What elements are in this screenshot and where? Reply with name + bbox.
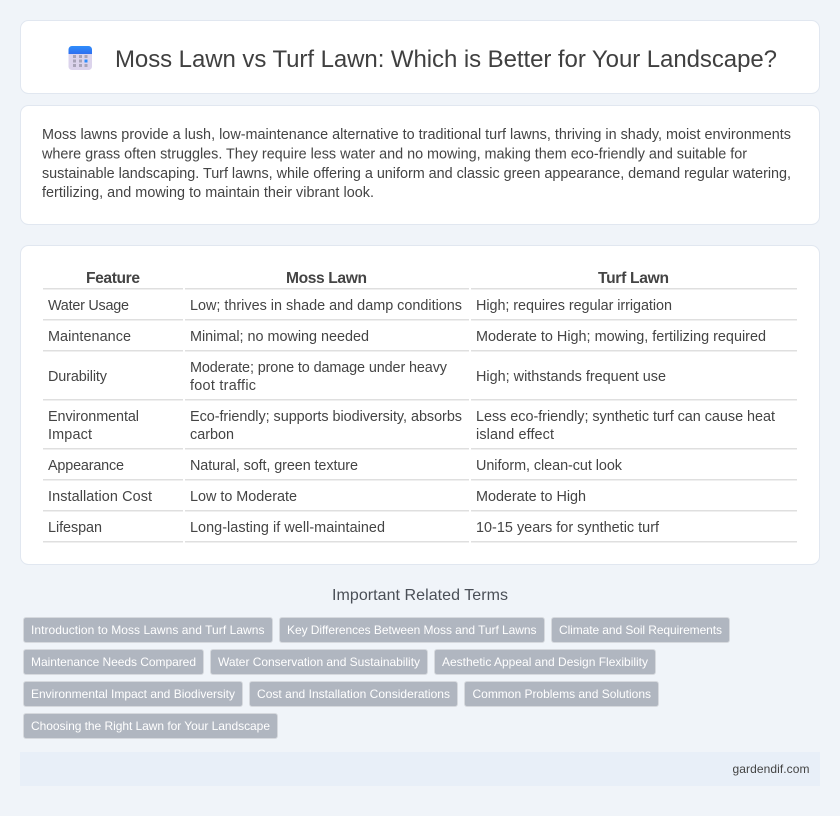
- table header row: Moss Lawn: [286, 270, 367, 287]
- footer source text: gardendif.com: [732, 762, 810, 776]
- tag: Common Problems and Solutions: [472, 687, 651, 701]
- row: lifespan: 10-15 years for synthetic turf: [476, 520, 660, 536]
- row: environmental impact: Environmental: [48, 409, 139, 425]
- table header row: [86, 270, 669, 287]
- row: installation cost: Moderate to High: [476, 489, 586, 505]
- tag: Climate and Soil Requirements: [559, 623, 722, 637]
- row: appearance: Appearance: [48, 458, 124, 474]
- tag: [434, 650, 656, 674]
- row: appearance: [48, 458, 623, 474]
- icon: calendar: [68, 46, 92, 70]
- tag: [24, 714, 278, 738]
- tag: [24, 618, 272, 642]
- panel: header: [20, 20, 820, 94]
- row: lifespan: Lifespan: [48, 520, 102, 536]
- heading: important related terms: Important Related Terms: [332, 587, 508, 604]
- row: installation cost: Low to Moderate: [190, 489, 297, 505]
- row: water usage: High; requires regular irrigation: [476, 298, 672, 314]
- panel: introduction: [20, 106, 820, 224]
- row: maintenance: Minimal; no mowing needed: [190, 329, 369, 345]
- row: durability: [48, 360, 666, 394]
- row: maintenance: [48, 329, 766, 345]
- row: durability: High; withstands frequent use: [476, 369, 666, 385]
- text block: introduction paragraph: fertilizing, and mowing to maintain their vibrant look.: [42, 185, 374, 201]
- row: maintenance: Moderate to High; mowing, fertilizing required: [476, 329, 766, 345]
- tag: [464, 682, 658, 706]
- row: durability: foot traffic: [190, 378, 256, 394]
- row: environmental impact: Eco-friendly; supports biodiversity, absorbs: [190, 409, 462, 425]
- row: maintenance: Maintenance: [48, 329, 131, 345]
- row: lifespan: [48, 520, 660, 536]
- tag: [24, 682, 242, 706]
- row: water usage: Water Usage: [48, 298, 129, 314]
- tag: [280, 618, 544, 642]
- row: appearance: Uniform, clean-cut look: [476, 458, 623, 474]
- row: environmental impact: Less eco-friendly; synthetic turf can cause heat: [476, 409, 775, 425]
- tag: Cost and Installation Considerations: [257, 687, 450, 701]
- row: appearance: Natural, soft, green texture: [190, 458, 358, 474]
- tag: [250, 682, 458, 706]
- row: durability: Durability: [48, 369, 108, 385]
- tag: Key Differences Between Moss and Turf Lawns: [287, 623, 536, 637]
- tag: [24, 650, 204, 674]
- tag: Aesthetic Appeal and Design Flexibility: [442, 655, 648, 669]
- row: water usage: Low; thrives in shade and damp conditions: [190, 298, 462, 314]
- table header row: Feature: [86, 270, 140, 287]
- tag: Choosing the Right Lawn for Your Landscape: [31, 719, 270, 733]
- table header row: Turf Lawn: [598, 270, 669, 287]
- row: environmental impact: Impact: [48, 427, 92, 443]
- row: water usage: [48, 298, 672, 314]
- panel: related term tags: [24, 618, 730, 738]
- tag: [210, 650, 428, 674]
- footer: [20, 752, 820, 786]
- text block: introduction paragraph: [41, 127, 791, 201]
- row: lifespan: Long-lasting if well-maintained: [190, 520, 385, 536]
- row: environmental impact: carbon: [190, 427, 234, 443]
- text block: introduction paragraph: Moss lawns provide a lush, low-maintenance alternative to traditional turf lawns, thriving in shady, moist environments: [42, 127, 791, 143]
- tag: Maintenance Needs Compared: [31, 655, 196, 669]
- tag: Environmental Impact and Biodiversity: [31, 687, 235, 701]
- title: Moss Lawn vs Turf Lawn: Which is Better for Your Landscape?: [115, 46, 777, 73]
- row: durability: Moderate; prone to damage under heavy: [190, 360, 448, 376]
- tag: Water Conservation and Sustainability: [218, 655, 420, 669]
- row: installation cost: Installation Cost: [48, 489, 152, 505]
- text block: introduction paragraph: sustainable landscaping. Turf lawns, while offering a uniform and classic green appearance, demand regular watering,: [42, 166, 791, 182]
- panel: comparison table: [20, 246, 820, 564]
- text block: introduction paragraph: where grass often struggles. They require less water and no mowing, making them eco-friendly and suitable for: [41, 146, 747, 162]
- row: installation cost: [48, 489, 586, 505]
- row: environmental impact: [48, 409, 775, 443]
- tag: [552, 618, 730, 642]
- tag: Introduction to Moss Lawns and Turf Lawns: [31, 623, 264, 637]
- row: environmental impact: island effect: [476, 427, 554, 443]
